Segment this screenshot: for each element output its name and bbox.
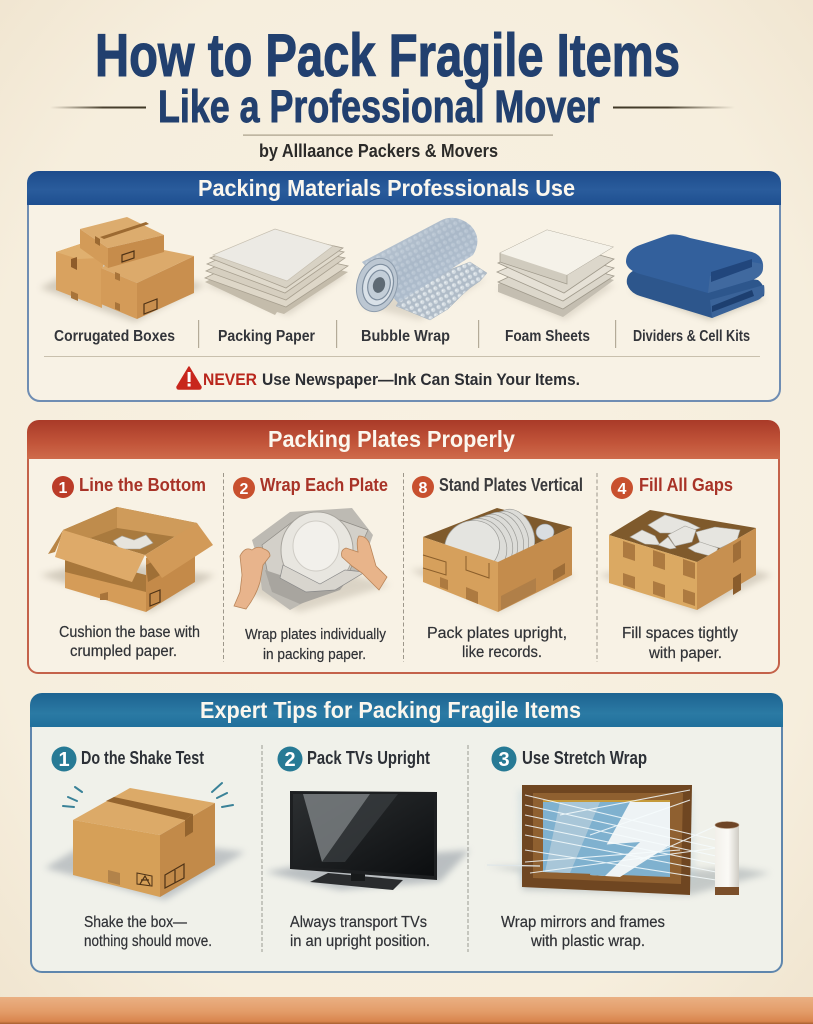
tip 3: [487, 746, 770, 950]
tip text: [290, 914, 430, 950]
tip heading: Use Stretch Wrap: [522, 748, 647, 768]
step heading: Line the Bottom: [79, 474, 206, 495]
icon: shaking cardboard box: [45, 783, 245, 900]
tip 1: [45, 746, 245, 950]
tip 2: [265, 746, 470, 950]
step text: Fill spaces tightly: [622, 625, 738, 642]
icon: open box with crumpled paper: [40, 507, 215, 612]
step text: [622, 625, 738, 662]
icon: flat screen TV on stand: [265, 791, 470, 890]
panel body: [28, 430, 779, 673]
icon: bubble wrap roll: [351, 218, 487, 320]
panel header: [27, 420, 780, 459]
footer band: [0, 997, 813, 1024]
panel body: [31, 703, 782, 972]
label: Packing Paper: [218, 328, 315, 345]
panel heading: Expert Tips for Packing Fragile Items: [200, 697, 581, 723]
step text: crumpled paper.: [70, 643, 177, 660]
icon: hands wrapping plate in paper: [234, 508, 390, 612]
tip text: nothing should move.: [84, 933, 212, 950]
number badge: [492, 746, 516, 772]
divider: [336, 320, 337, 348]
step text: [427, 625, 567, 661]
step text: Cushion the base with: [59, 624, 200, 641]
panel body: [28, 180, 780, 401]
divider: [478, 320, 479, 348]
step heading: Fill All Gaps: [639, 474, 733, 495]
panel: expert tips: [30, 693, 783, 972]
tip text: [84, 914, 212, 950]
number badge: [52, 746, 76, 772]
number badge: 2: [240, 481, 249, 498]
label: Bubble Wrap: [361, 328, 450, 345]
number badge: 3: [498, 749, 510, 771]
step 4: [598, 474, 772, 662]
label: Foam Sheets: [505, 328, 590, 345]
number badge: 4: [618, 481, 627, 498]
number badge: 1: [59, 480, 68, 497]
number badge: [52, 476, 74, 498]
step text: with paper.: [648, 645, 722, 662]
icon: mirror frame and stretch wrap roll: [487, 785, 770, 895]
icon: packing paper stack: [205, 229, 348, 315]
panel heading: Packing Plates Properly: [268, 426, 515, 452]
step text: [59, 624, 200, 660]
number badge: [412, 476, 434, 498]
tip text: Shake the box—: [84, 914, 187, 931]
panel: packing materials: [27, 171, 781, 401]
icon: box with upright plates: [410, 503, 575, 612]
label: Dividers & Cell Kits: [633, 328, 750, 345]
step 1: [40, 474, 215, 660]
step heading: Stand Plates Vertical: [439, 474, 583, 495]
label: Corrugated Boxes: [54, 328, 175, 345]
icon: foam sheets stack: [497, 230, 615, 320]
panel heading: Packing Materials Professionals Use: [198, 175, 575, 201]
step text: like records.: [462, 644, 542, 661]
step text: [245, 627, 387, 663]
number badge: [278, 746, 302, 772]
icon: stacked cardboard boxes: [40, 217, 205, 322]
divider: [198, 320, 199, 348]
step text: Wrap plates individually: [245, 627, 387, 643]
tip heading: Do the Shake Test: [81, 748, 204, 768]
tip text: Always transport TVs: [290, 914, 427, 931]
number badge: [611, 477, 633, 499]
number badge: 2: [284, 749, 296, 771]
number badge: 8: [419, 480, 428, 497]
icon: box with crumpled paper filled gaps: [598, 510, 772, 612]
tip text: [501, 914, 665, 950]
panel header: [30, 693, 783, 727]
icon: warning triangle: [177, 367, 201, 389]
byline: by Alllaance Packers & Movers: [259, 141, 498, 161]
number badge: 1: [58, 749, 70, 771]
tip text: with plastic wrap.: [530, 933, 645, 950]
warning callout: [177, 367, 580, 389]
step text: in packing paper.: [263, 647, 366, 663]
warning callout: NEVER: [203, 370, 257, 389]
step text: Pack plates upright,: [427, 625, 567, 642]
number badge: [233, 477, 255, 499]
step 3: [410, 474, 583, 661]
step heading: Wrap Each Plate: [260, 474, 388, 495]
panel header: [27, 171, 781, 205]
tip heading: Pack TVs Upright: [307, 748, 430, 768]
icon: folded blue blankets: [626, 234, 765, 320]
tip text: Wrap mirrors and frames: [501, 914, 665, 931]
subtitle: Like a Professional Mover: [158, 81, 600, 132]
divider: [615, 320, 616, 348]
warning callout: Use Newspaper—Ink Can Stain Your Items.: [262, 370, 580, 389]
panel: packing plates: [27, 420, 780, 673]
tip text: in an upright position.: [290, 933, 430, 950]
step 2: [233, 474, 390, 663]
